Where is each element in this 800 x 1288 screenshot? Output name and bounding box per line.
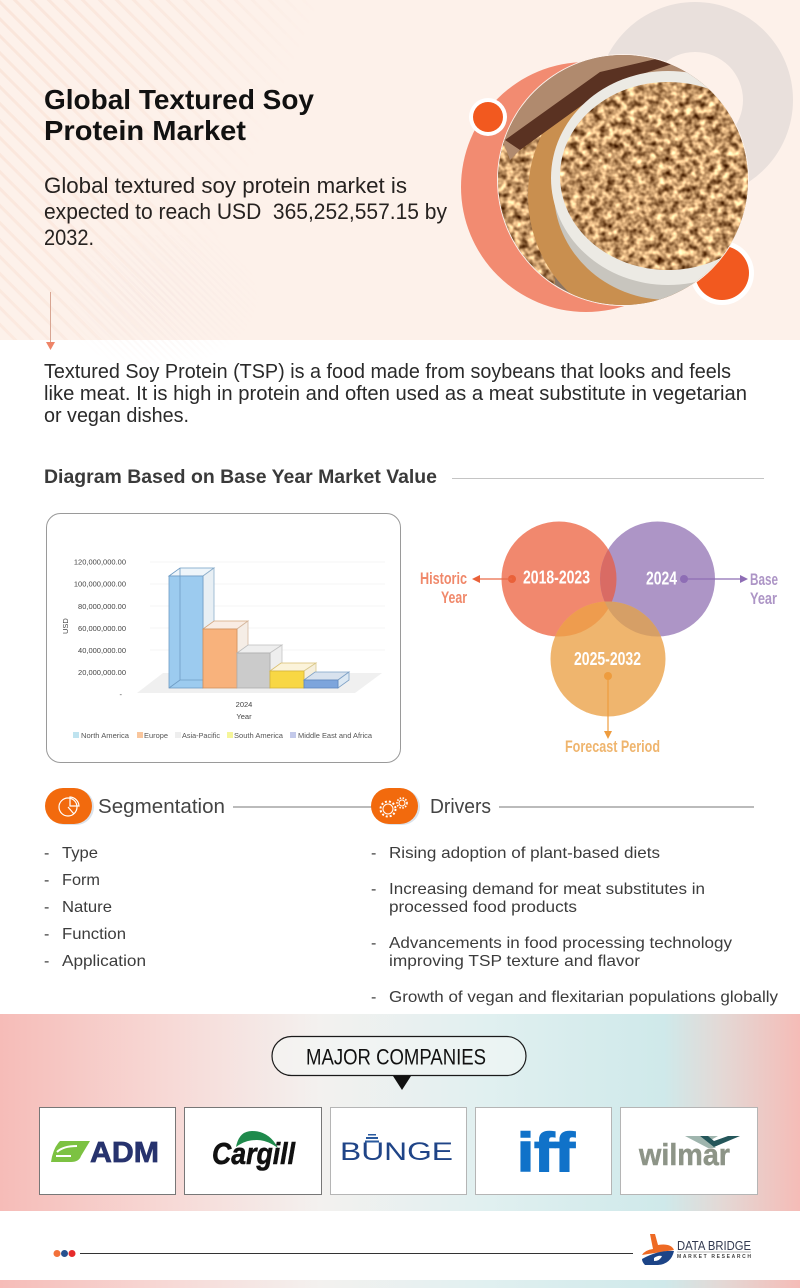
chart axis labels: 80,000,000.00	[78, 602, 126, 611]
drivers heading	[371, 788, 754, 825]
description text: like meat. It is high in protein and often used as a meat substitute in vegetarian	[44, 383, 747, 405]
bottom gradient strip	[0, 1280, 800, 1288]
circle: base	[600, 522, 715, 636]
text: Historic Year: Year	[441, 588, 467, 607]
bar chart panel	[46, 514, 400, 762]
hero image group	[461, 2, 793, 323]
label: 2018-2023: 2018-2023	[523, 568, 590, 588]
footer rule with dots	[54, 1250, 633, 1257]
drivers list: processed food products	[389, 899, 577, 916]
chart axis labels: 100,000,000.00	[74, 580, 126, 588]
overlap: historic and base	[600, 549, 616, 602]
chart legend	[73, 731, 373, 740]
chart axis labels	[74, 558, 126, 699]
segmentation list: Nature	[62, 899, 112, 916]
footer logo: Data Bridge: DATA BRIDGE	[677, 1238, 751, 1253]
drivers list: Growth of vegan and flexitarian populations globally	[389, 989, 778, 1006]
chart legend: South America	[234, 731, 284, 740]
label: 2024: 2024	[646, 568, 677, 588]
circle: historic	[502, 522, 616, 636]
logo card: Bunge	[330, 1108, 466, 1194]
segmentation list: Function	[62, 926, 126, 943]
segmentation list	[44, 845, 146, 970]
drivers list: -	[371, 935, 376, 952]
logo card: Cargill	[184, 1108, 322, 1194]
bar: Middle East and Africa	[304, 672, 349, 688]
description text	[44, 361, 747, 427]
arrow down	[46, 292, 55, 350]
drivers icon pill	[371, 788, 420, 825]
logo card: ADM: ADM	[90, 1137, 159, 1169]
orange dot top left	[469, 98, 507, 136]
major companies label: MAJOR COMPANIES	[306, 1044, 486, 1070]
segmentation list: Type	[62, 845, 98, 862]
market summary text: 2032.	[44, 225, 94, 250]
bar: Asia-Pacific	[237, 645, 282, 688]
segmentation list: Application	[62, 953, 146, 970]
logo card: IFF	[476, 1108, 612, 1194]
orange dot bottom right	[690, 241, 754, 305]
drivers list: -	[371, 845, 376, 862]
footer logo: Data Bridge: MARKET RESEARCH	[677, 1254, 751, 1260]
chart x axis labels: Year	[236, 712, 252, 721]
diagram heading: Diagram Based on Base Year Market Value	[44, 467, 437, 488]
title: Global Textured Soy	[44, 84, 314, 115]
chart legend: Asia-Pacific	[182, 731, 220, 740]
connector: historic	[472, 575, 516, 583]
logo card: Wilmar: wilmar	[638, 1137, 730, 1172]
text: Historic Year	[420, 569, 467, 607]
description text: Textured Soy Protein (TSP) is a food made from soybeans that looks and feels	[44, 361, 731, 383]
overlap: base and forecast	[604, 602, 661, 636]
drivers list: Rising adoption of plant-based diets	[389, 845, 660, 862]
venn diagram	[420, 522, 778, 756]
major companies label	[272, 1036, 526, 1090]
text: Base Year: Base	[750, 570, 778, 589]
market summary text: expected to reach USD 365,252,557.15 by	[44, 199, 447, 224]
text: Base Year	[750, 570, 778, 608]
bar: South America	[270, 663, 316, 688]
segmentation list: -	[44, 926, 49, 943]
salmon disc	[461, 62, 711, 312]
chart legend: North America	[81, 731, 130, 740]
photo: bowl of textured soy protein	[497, 54, 749, 306]
logo card: ADM	[40, 1108, 176, 1194]
chart legend: Middle East and Africa	[298, 731, 373, 740]
drivers list: improving TSP texture and flavor	[389, 953, 641, 970]
circle: forecast	[550, 602, 666, 716]
label: 2025-2032: 2025-2032	[574, 649, 641, 669]
hero panel	[0, 0, 800, 370]
chart legend: Europe	[144, 731, 168, 740]
logo card: IFF: iff	[517, 1121, 576, 1183]
major companies band	[0, 1014, 800, 1211]
segmentation list: Form	[62, 872, 100, 889]
chart y axis title: USD	[61, 618, 70, 634]
footer logo: Data Bridge	[642, 1234, 751, 1265]
chart axis labels: 60,000,000.00	[78, 624, 126, 633]
text: Forecast Period: Forecast Period	[565, 737, 660, 756]
chart axis labels: 120,000,000.00	[74, 558, 126, 566]
logo card: Bunge: BUNGE	[340, 1138, 453, 1166]
chart axis labels: -	[120, 690, 122, 699]
description text: or vegan dishes.	[44, 405, 189, 427]
chart x axis labels: 2024	[236, 700, 252, 709]
text: Historic Year: Historic	[420, 569, 467, 588]
drivers heading: Drivers	[430, 796, 491, 818]
segmentation list: -	[44, 899, 49, 916]
bar: North America	[169, 568, 214, 688]
drivers list: Advancements in food processing technology	[389, 935, 732, 952]
bar: Europe	[203, 621, 248, 688]
chart floor	[137, 673, 382, 693]
title: Protein Market	[44, 115, 246, 146]
drivers list	[371, 845, 778, 1006]
segmentation list: -	[44, 953, 49, 970]
connector: forecast	[604, 672, 612, 739]
market summary text: Global textured soy protein market is	[44, 173, 407, 198]
segmentation list: -	[44, 845, 49, 862]
segmentation icon pill	[45, 788, 94, 825]
decorative grey ring	[597, 2, 793, 198]
connector: base	[680, 575, 748, 583]
drivers list: -	[371, 881, 376, 898]
market summary text	[44, 173, 447, 250]
segmentation heading: Segmentation	[98, 796, 225, 818]
drivers list: -	[371, 989, 376, 1006]
chart axis labels: 40,000,000.00	[78, 646, 126, 655]
chart x axis labels	[236, 700, 252, 721]
overlap: historic and forecast	[555, 602, 608, 636]
segmentation heading	[45, 788, 372, 825]
text: Base Year: Year	[750, 589, 777, 608]
logo card: Wilmar	[620, 1108, 758, 1194]
chart axis labels: 20,000,000.00	[78, 668, 126, 677]
segmentation list: -	[44, 872, 49, 889]
drivers list: Increasing demand for meat substitutes in	[389, 881, 705, 898]
logo card: Cargill: Cargill	[212, 1136, 296, 1171]
